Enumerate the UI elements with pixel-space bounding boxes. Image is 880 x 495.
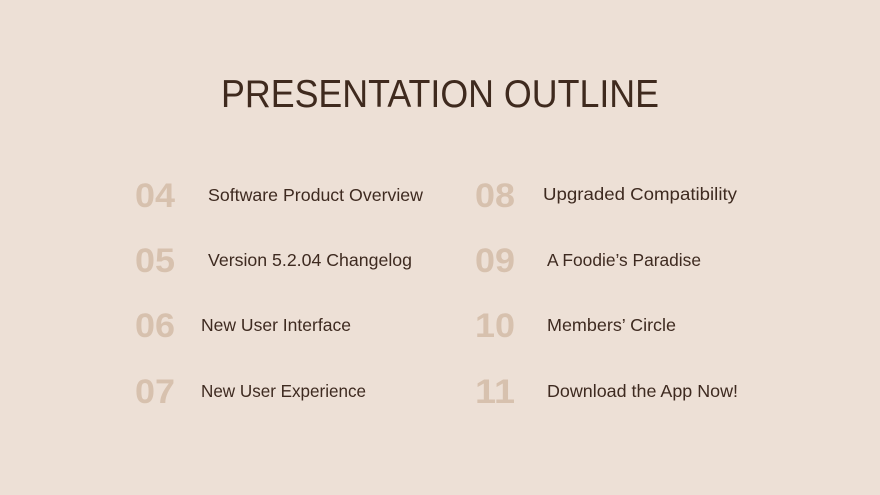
item 06: New User Interface	[201, 315, 351, 335]
item 06: 06	[135, 307, 175, 345]
item 08: 08	[475, 177, 515, 215]
item 11: Download the App Now!	[547, 381, 738, 401]
item 10: Members’ Circle	[547, 315, 676, 335]
item 10: 10	[475, 307, 515, 345]
item 04: Software Product Overview	[208, 185, 423, 205]
item 09	[475, 242, 701, 280]
item 09: 09	[475, 242, 515, 280]
item 07: New User Experience	[201, 381, 366, 401]
item 11: 11	[475, 373, 515, 411]
item 05: 05	[135, 242, 175, 280]
item 05	[135, 242, 412, 280]
title: PRESENTATION OUTLINE	[221, 73, 659, 116]
list: left column	[135, 177, 423, 411]
list: right column	[475, 177, 738, 411]
item 08: Upgraded Compatibility	[543, 184, 737, 204]
item 06	[135, 307, 351, 345]
item 09: A Foodie’s Paradise	[547, 250, 701, 270]
item 11	[475, 373, 738, 411]
item 08	[475, 177, 737, 215]
item 07	[135, 373, 366, 411]
item 04: 04	[135, 177, 175, 215]
item 07: 07	[135, 373, 175, 411]
item 04	[135, 177, 423, 215]
item 05: Version 5.2.04 Changelog	[208, 250, 412, 270]
item 10	[475, 307, 676, 345]
